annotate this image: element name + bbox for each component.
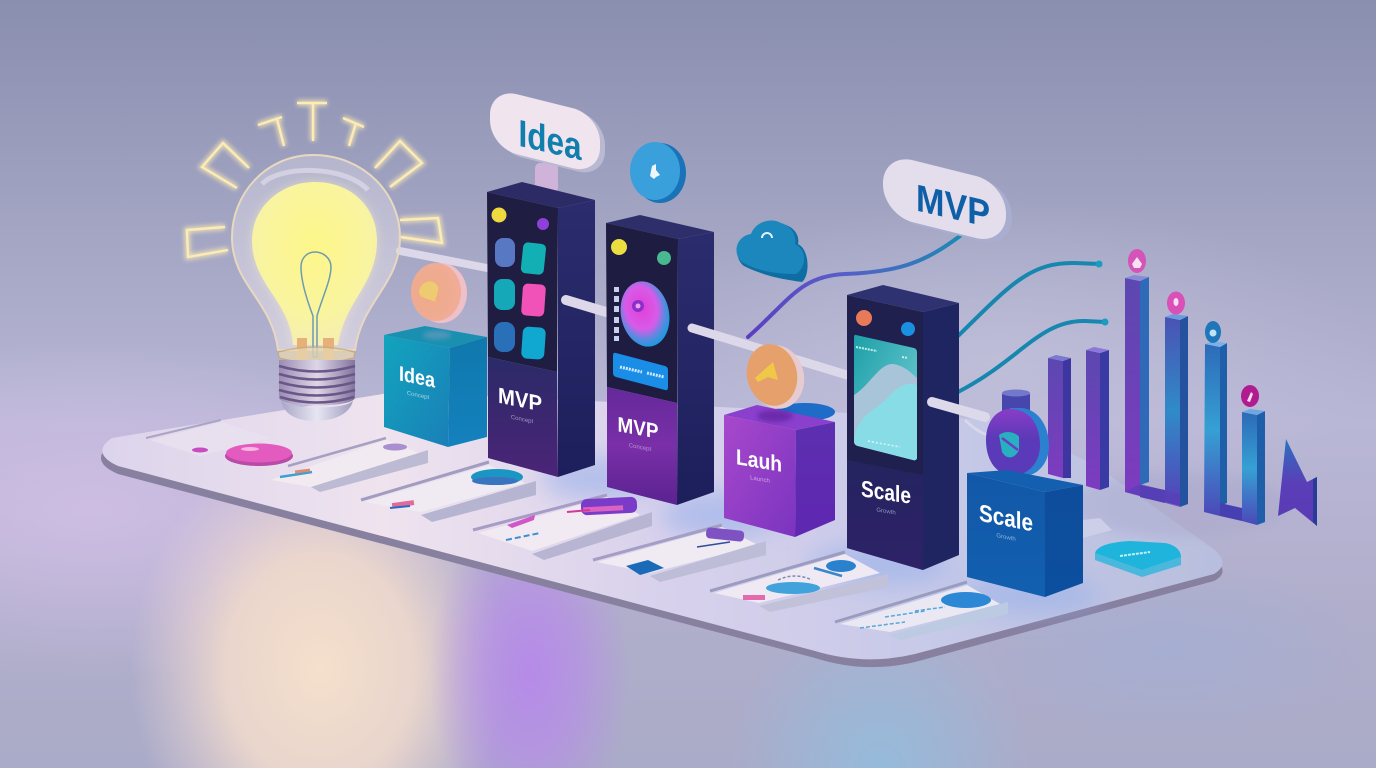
MVP bubble — [883, 153, 1012, 249]
light bulb — [232, 155, 400, 421]
scale cube — [967, 470, 1083, 597]
rod: bulb to tower — [400, 251, 487, 268]
bar chart — [1048, 249, 1317, 526]
rod: tower 2 to tower 3 — [692, 328, 847, 375]
tower sublabel: Concept — [629, 443, 651, 453]
card 4 — [473, 495, 652, 560]
bar A — [1048, 355, 1071, 478]
status dots — [492, 208, 549, 230]
glass highlight — [262, 170, 368, 190]
app icons — [494, 238, 547, 360]
cube sublabel: Growth — [996, 533, 1016, 543]
cube label: Idea — [399, 363, 435, 393]
bar B — [1086, 347, 1109, 490]
U bar 2 — [1204, 341, 1265, 525]
tower sublabel: Concept — [511, 415, 533, 425]
bulb base — [278, 347, 355, 421]
platform — [101, 392, 1290, 667]
card 5 — [593, 525, 766, 582]
bubble text: Idea — [518, 112, 582, 169]
scale disc — [986, 408, 1049, 476]
tower 2 — [606, 215, 714, 505]
card 1 — [146, 420, 270, 456]
screen chart — [854, 335, 917, 460]
status dots — [856, 310, 915, 336]
tower 1 — [487, 182, 595, 477]
status dots — [611, 239, 671, 265]
cloud icon — [736, 220, 808, 282]
cube sublabel: Launch — [750, 475, 770, 485]
bulb glass — [232, 155, 400, 350]
teal badge — [1095, 541, 1181, 577]
filament — [301, 252, 331, 357]
orange disc — [741, 339, 810, 414]
pin icons — [1128, 249, 1259, 407]
cube label: Scale — [979, 500, 1033, 537]
Idea cube — [384, 326, 487, 447]
card 7 — [835, 582, 1008, 640]
tower label: Scale — [861, 475, 911, 509]
rod: tower 1 to tower 2 — [566, 300, 606, 312]
tower label: MVP — [618, 413, 658, 444]
filament supports — [297, 338, 334, 360]
card 8 — [1083, 518, 1112, 538]
flow curves — [748, 236, 1108, 392]
blue disc — [630, 142, 686, 203]
card 3 — [361, 462, 536, 522]
tower floor shadows — [540, 456, 1100, 613]
magenta disc — [225, 444, 293, 466]
card 2 — [271, 438, 428, 492]
cube sublabel: Concept — [407, 391, 429, 401]
tower label: MVP — [498, 383, 542, 416]
cylinder behind disc — [1002, 390, 1030, 419]
Idea bubble — [490, 88, 605, 193]
bulb glow — [252, 182, 377, 345]
bulb glow core — [252, 182, 377, 345]
swirl graphic — [615, 277, 675, 351]
tower sublabel: Growth — [876, 508, 896, 516]
peach disc — [411, 263, 467, 323]
rod: tower 3 to scale cube — [932, 402, 995, 436]
tower 3 — [847, 285, 959, 570]
cube label: Lauh — [736, 444, 782, 477]
blue panel — [613, 353, 668, 390]
mini list — [614, 287, 619, 341]
bubble text: MVP — [916, 177, 990, 236]
card 6 — [710, 552, 888, 612]
light rays — [187, 103, 442, 257]
launch cube — [724, 403, 835, 537]
arrow shape — [1278, 439, 1317, 526]
U bar 1 — [1125, 275, 1188, 507]
